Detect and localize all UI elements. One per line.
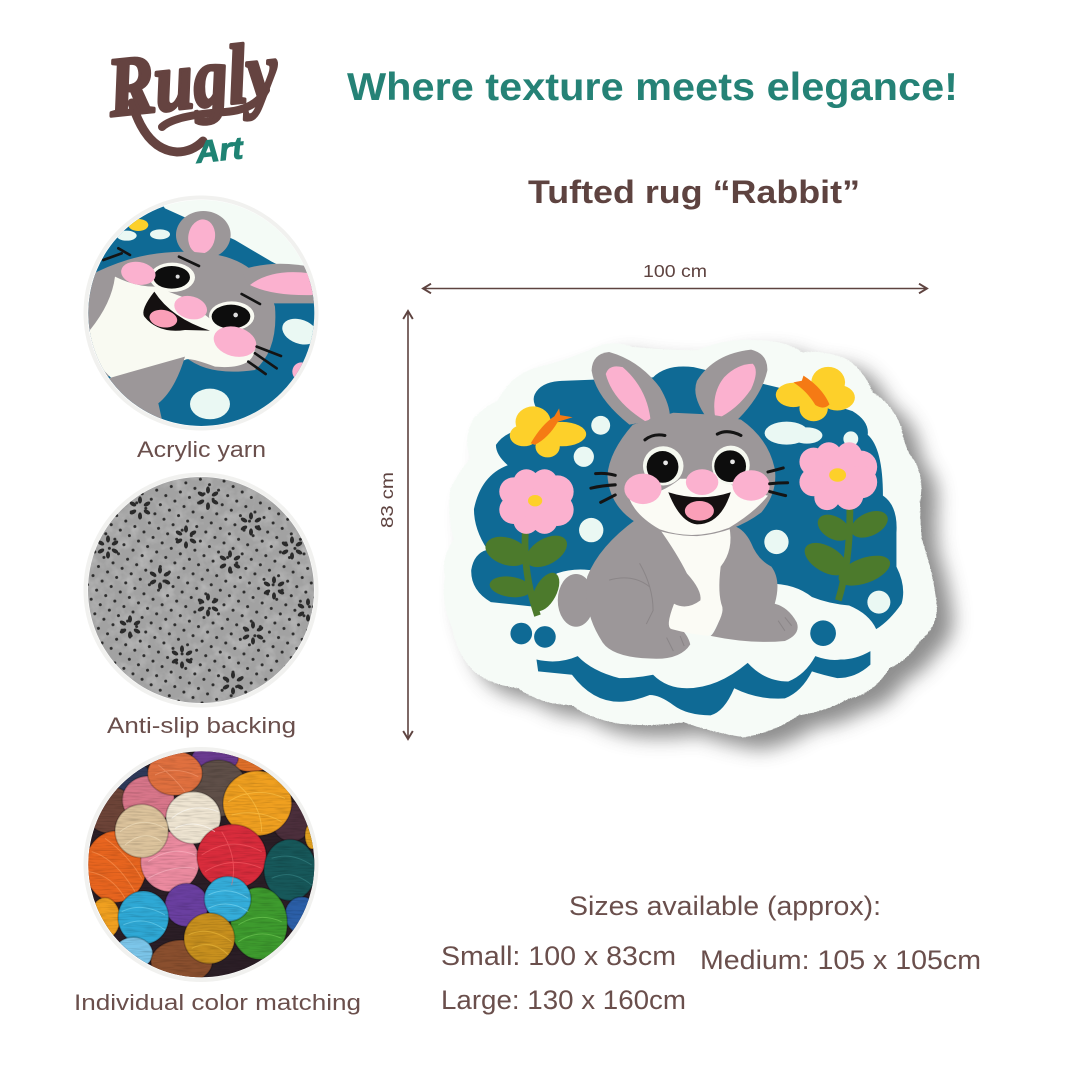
blue field xyxy=(471,367,903,629)
sizes block xyxy=(441,891,981,1015)
rug illustration xyxy=(444,340,953,749)
sky dots and cloud xyxy=(574,416,890,614)
rug base xyxy=(444,340,937,737)
blue dots xyxy=(510,620,836,648)
rabbit eyes xyxy=(643,446,750,485)
detail circle: anti-slip backing xyxy=(86,474,319,706)
rabbit ears xyxy=(592,350,767,425)
rabbit mouth xyxy=(668,492,731,524)
logo: Rugly Art: Art xyxy=(193,130,246,170)
bottom wave xyxy=(536,651,870,715)
rabbit body xyxy=(586,519,798,659)
width dimension: 100 cm xyxy=(643,261,707,281)
sizes heading: Sizes available (approx): xyxy=(569,891,881,921)
detail circle: acrylic yarn xyxy=(84,196,318,430)
left flower plant xyxy=(482,469,574,616)
logo: Rugly Art xyxy=(102,25,283,170)
small size: Small: 100 x 83cm xyxy=(441,941,676,971)
rabbit muzzle xyxy=(629,479,768,535)
rabbit cheeks and nose xyxy=(624,469,770,504)
caption: individual color matching: Individual color matching xyxy=(74,990,361,1015)
caption: acrylic yarn: Acrylic yarn xyxy=(137,437,266,462)
title: Where texture meets elegance! xyxy=(347,66,958,109)
rabbit brows and whiskers xyxy=(591,432,788,502)
rabbit tail xyxy=(558,574,594,627)
rabbit fold lines xyxy=(609,563,792,651)
rabbit head xyxy=(607,413,775,536)
rabbit chest xyxy=(660,526,731,636)
rug shadow xyxy=(460,352,953,749)
right flower plant xyxy=(799,442,894,600)
caption: anti-slip backing: Anti-slip backing xyxy=(107,713,296,738)
right butterfly xyxy=(776,367,855,421)
rabbit xyxy=(558,350,798,659)
detail circle: yarn balls xyxy=(84,747,318,982)
medium size: Medium: 105 x 105cm xyxy=(700,945,981,975)
large size: Large: 130 x 160cm xyxy=(441,985,686,1015)
logo: Rugly Art: Rugly xyxy=(102,25,283,135)
left butterfly xyxy=(510,406,586,457)
height dimension: 83 cm xyxy=(377,472,397,528)
product heading: Tufted rug “Rabbit” xyxy=(528,174,860,210)
